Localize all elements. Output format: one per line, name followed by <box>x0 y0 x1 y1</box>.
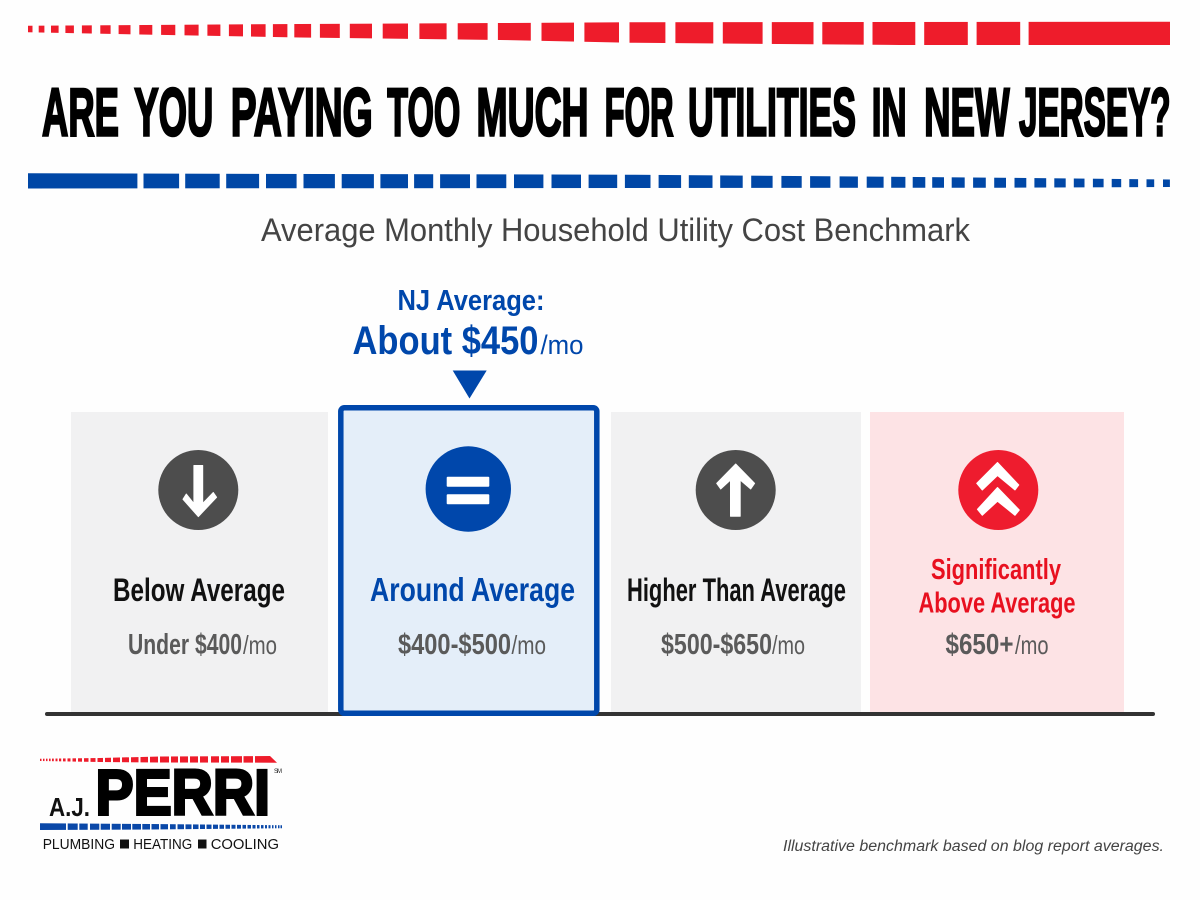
logo red dashes <box>40 756 277 763</box>
price range: /mo <box>1015 630 1048 660</box>
price range: /mo <box>772 630 805 660</box>
title: ARE <box>42 75 119 151</box>
arrow: pointer to around average <box>453 370 487 398</box>
logo blue dashes <box>40 823 282 830</box>
title <box>42 75 1170 151</box>
price range: $650+ <box>946 629 1014 661</box>
label: Higher Than Average <box>627 572 846 608</box>
title: NEW <box>924 75 1010 151</box>
icon: equals <box>426 446 511 532</box>
price range: $500-$650 <box>661 629 772 661</box>
label: Significantly <box>931 554 1061 586</box>
logo A.J.: A.J. <box>49 792 90 822</box>
icon: down arrow <box>158 450 238 530</box>
price range: Under $400 <box>128 629 242 661</box>
title: IN <box>872 75 907 151</box>
price range: $400-$500 <box>398 629 511 661</box>
title: FOR <box>605 75 674 151</box>
subtitle: Average Monthly Household Utility Cost Benchmark <box>261 212 971 248</box>
icon: up arrow <box>696 450 776 530</box>
title: UTILITIES <box>688 75 856 151</box>
callout: NJ average: /mo <box>540 330 584 360</box>
baseline axis <box>45 712 1155 716</box>
label: Above Average <box>918 588 1076 620</box>
title: MUCH <box>476 75 588 151</box>
title: TOO <box>387 75 460 151</box>
panel: below average <box>71 412 328 712</box>
callout: NJ average: About $450 <box>352 319 538 363</box>
label <box>918 554 1076 620</box>
price range: /mo <box>243 630 277 660</box>
label: Below Average <box>113 572 285 608</box>
footnote: Illustrative benchmark based on blog report averages. <box>783 838 1164 855</box>
logo service mark: SM <box>274 769 282 775</box>
label: Around Average <box>370 571 575 608</box>
title: PAYING <box>231 75 373 151</box>
red dashed divider <box>28 22 1170 45</box>
price range: /mo <box>512 630 546 660</box>
callout: NJ average <box>352 285 584 363</box>
icon: double chevron up <box>958 450 1038 530</box>
logo tagline: PLUMBING <box>43 836 115 853</box>
logo PERRI: PERRI <box>96 756 270 828</box>
panel: higher than average <box>611 412 861 712</box>
blue dashed divider <box>28 173 1170 188</box>
logo tagline <box>43 836 279 853</box>
title: YOU <box>134 75 213 151</box>
logo: A.J. Perri <box>40 750 282 853</box>
panel: significantly above average <box>870 412 1124 712</box>
logo tagline: HEATING <box>133 836 192 853</box>
callout: NJ average: NJ Average: <box>398 285 544 317</box>
logo tagline: COOLING <box>211 836 279 853</box>
panel: around average <box>341 408 597 713</box>
